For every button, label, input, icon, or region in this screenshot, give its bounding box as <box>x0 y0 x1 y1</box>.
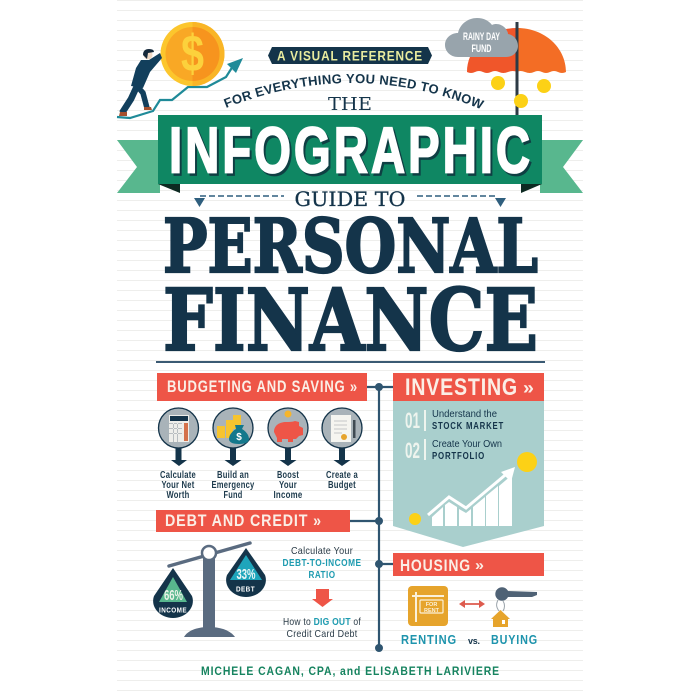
label: build an emergency fund: Build an <box>217 470 249 481</box>
icon: piggy bank <box>268 408 308 466</box>
label: calculate your net worth: Worth <box>166 490 190 501</box>
icon: umbrella with coins <box>467 22 566 116</box>
label: boost your income <box>274 470 303 501</box>
section header: budgeting <box>157 373 367 401</box>
panel: investing <box>393 373 544 547</box>
arched subtitle: FOR EVERYTHING YOU NEED TO KNOW <box>224 74 484 108</box>
authors: MICHELE CAGAN, CPA, and ELISABETH LARIVIERE <box>201 666 500 678</box>
label: boost your income: Income <box>274 490 303 501</box>
item 02: create your own portfolio: PORTFOLIO <box>432 451 485 462</box>
icon: rainy day fund cloud: RAINY DAY <box>463 31 500 43</box>
icon: rainy day fund cloud <box>445 18 518 57</box>
label: boost your income: Boost <box>277 470 299 481</box>
icon: income weight 66% <box>153 568 193 618</box>
chart: rising bars and arrow <box>428 467 515 526</box>
label: boost your income: Your <box>279 480 297 491</box>
section header: housing: » <box>475 557 485 574</box>
label: create a budget <box>326 470 358 491</box>
text: calculate debt-to-income ratio: Calculate Your <box>291 545 353 557</box>
icon: debt weight 33% <box>226 548 266 597</box>
icon: debt weight 33%: 33% <box>236 566 256 583</box>
text: calculate debt-to-income ratio: DEBT-TO-INCOME <box>282 557 362 569</box>
panel: budgeting and saving <box>157 373 367 501</box>
heading: guide to with arrows <box>194 187 506 211</box>
label: calculate your net worth <box>160 470 196 501</box>
icon: for rent sign: FOR <box>426 602 437 608</box>
icon: for rent sign: RENT <box>424 608 440 614</box>
label: build an emergency fund: Emergency <box>212 480 255 491</box>
item 01: understand the stock market <box>405 408 504 433</box>
heading: the: THE <box>328 94 372 115</box>
heading: personal: PERSONAL <box>163 204 538 290</box>
icon: red down arrow <box>312 589 333 607</box>
panel: debt and credit <box>153 510 362 640</box>
label: calculate your net worth: Calculate <box>160 470 196 481</box>
item 01: understand the stock market: 01 <box>405 408 420 433</box>
label: create a budget: Budget <box>328 480 356 491</box>
icon: for rent sign <box>408 586 448 626</box>
icon: emergency fund money bag: $ <box>236 432 242 443</box>
heading: infographic: INFOGRAPHIC <box>169 114 533 186</box>
section header: housing <box>393 553 544 576</box>
section header: investing: INVESTING <box>405 374 518 401</box>
investing teal shield <box>393 401 544 547</box>
label: buying: BUYING <box>491 632 538 647</box>
icon: small coin <box>409 513 421 525</box>
icon: debt weight 33%: DEBT <box>236 584 255 594</box>
heading: finance: FINANCE <box>163 271 538 371</box>
icon: calculator <box>158 408 198 466</box>
icon: emergency fund money bag <box>213 408 253 466</box>
label: calculate your net worth: Your Net <box>162 480 195 491</box>
section header: debt and credit: DEBT AND CREDIT » <box>165 512 322 530</box>
section header: housing: HOUSING <box>400 556 471 575</box>
icon: large coin <box>517 452 537 472</box>
icon: rainy day fund cloud: FUND <box>472 43 492 55</box>
text: calculate debt-to-income ratio: RATIO <box>308 569 336 581</box>
text: how to dig out of credit card debt: How to DIG OUT of <box>283 616 361 628</box>
heading: infographic: INFOGRAPHIC <box>171 116 535 189</box>
icon: man pushing coin up a rising arrow: $ <box>181 25 204 83</box>
icon: key with house tag <box>491 587 537 627</box>
icon: budget document <box>322 408 362 466</box>
label: renting: RENTING <box>401 632 457 647</box>
section header: investing: » <box>523 378 535 398</box>
icon: income weight 66%: INCOME <box>159 606 187 614</box>
label: vs.: vs. <box>468 636 480 646</box>
icon: income weight 66%: 66% <box>164 587 183 604</box>
connector timeline <box>350 383 393 652</box>
item 02: create your own portfolio <box>405 438 502 463</box>
icon: man pushing coin up a rising arrow <box>117 22 243 118</box>
item 01: understand the stock market: Understand the <box>432 409 497 420</box>
icon: double arrow <box>459 600 485 608</box>
panel: housing <box>393 553 544 647</box>
label: build an emergency fund: Fund <box>224 490 242 501</box>
ribbon banner <box>117 115 583 193</box>
item 02: create your own portfolio: 02 <box>405 438 420 463</box>
text: calculate debt-to-income ratio <box>282 545 362 581</box>
section header: budgeting: BUDGETING AND SAVING » <box>167 378 358 396</box>
tag: a visual reference: A VISUAL REFERENCE <box>277 48 423 64</box>
heading: guide to with arrows: GUIDE TO <box>294 187 406 211</box>
item 02: create your own portfolio: Create Your Own <box>432 439 502 450</box>
label: build an emergency fund <box>212 470 255 501</box>
icon: balance scale <box>169 543 250 637</box>
label: create a budget: Create a <box>326 470 358 481</box>
text: how to dig out of credit card debt <box>283 616 361 640</box>
text: how to dig out of credit card debt: Credit Card Debt <box>286 628 358 640</box>
item 01: understand the stock market: STOCK MARKET <box>432 421 504 432</box>
